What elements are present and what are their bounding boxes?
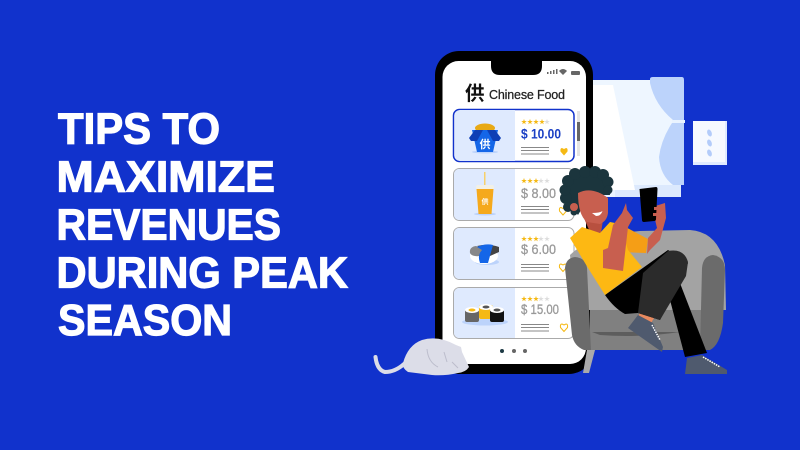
near shin <box>638 250 688 320</box>
title <box>56 104 348 345</box>
handheld phone <box>640 187 658 222</box>
card: takeout box <box>454 110 574 162</box>
scrollbar <box>577 111 580 156</box>
app heading <box>465 83 565 105</box>
card: drink: 供 <box>482 197 488 206</box>
card: takeout box: ★★★★ <box>521 119 545 126</box>
person <box>560 166 727 374</box>
card: takeout box: ★ <box>544 119 550 126</box>
pagination dots <box>500 349 527 353</box>
title: DURING PEAK <box>56 248 348 298</box>
card: sushi: $ 6.00 <box>521 241 556 257</box>
far shoe laces <box>703 357 720 367</box>
app heading: Chinese Food <box>489 88 565 102</box>
armchair <box>565 230 726 373</box>
ankle <box>638 312 654 325</box>
cat <box>376 338 469 375</box>
title: SEASON <box>58 296 232 345</box>
shirt <box>570 222 642 295</box>
hair <box>560 166 614 216</box>
raised arm <box>603 203 633 271</box>
sleeve <box>618 223 648 253</box>
ear <box>570 203 578 211</box>
light switch <box>693 121 727 165</box>
fingers <box>653 207 664 216</box>
face <box>578 190 608 224</box>
card: sushi <box>454 228 574 280</box>
card: sushi: ★★★ <box>521 236 539 243</box>
far shoe <box>685 355 727 374</box>
card: sushi rolls: ★★ <box>538 296 550 303</box>
smile <box>592 211 602 216</box>
card: drink <box>454 168 574 220</box>
card: takeout box: 供 <box>480 137 490 151</box>
near shoe <box>628 315 663 352</box>
card: drink: ★★ <box>538 178 550 185</box>
thigh <box>605 250 688 320</box>
phone <box>435 51 593 374</box>
app heading: 供 <box>465 83 485 105</box>
near shoe laces <box>652 325 660 340</box>
card: drink: $ 8.00 <box>521 185 556 201</box>
card: drink: ★★★ <box>521 178 539 185</box>
title: TIPS TO <box>58 104 220 154</box>
card: sushi rolls: ★★★ <box>521 296 539 303</box>
phone arm <box>647 203 666 254</box>
title: MAXIMIZE <box>56 152 275 202</box>
card: sushi: ★★ <box>538 236 550 243</box>
window with curtains <box>590 77 685 197</box>
card: sushi rolls: $ 15.00 <box>521 301 559 317</box>
far leg <box>670 278 707 357</box>
title: REVENUES <box>56 200 281 250</box>
card: takeout box: $ 10.00 <box>521 126 561 142</box>
status bar icons <box>547 69 580 75</box>
neck <box>583 216 603 233</box>
card: sushi rolls <box>454 288 574 338</box>
